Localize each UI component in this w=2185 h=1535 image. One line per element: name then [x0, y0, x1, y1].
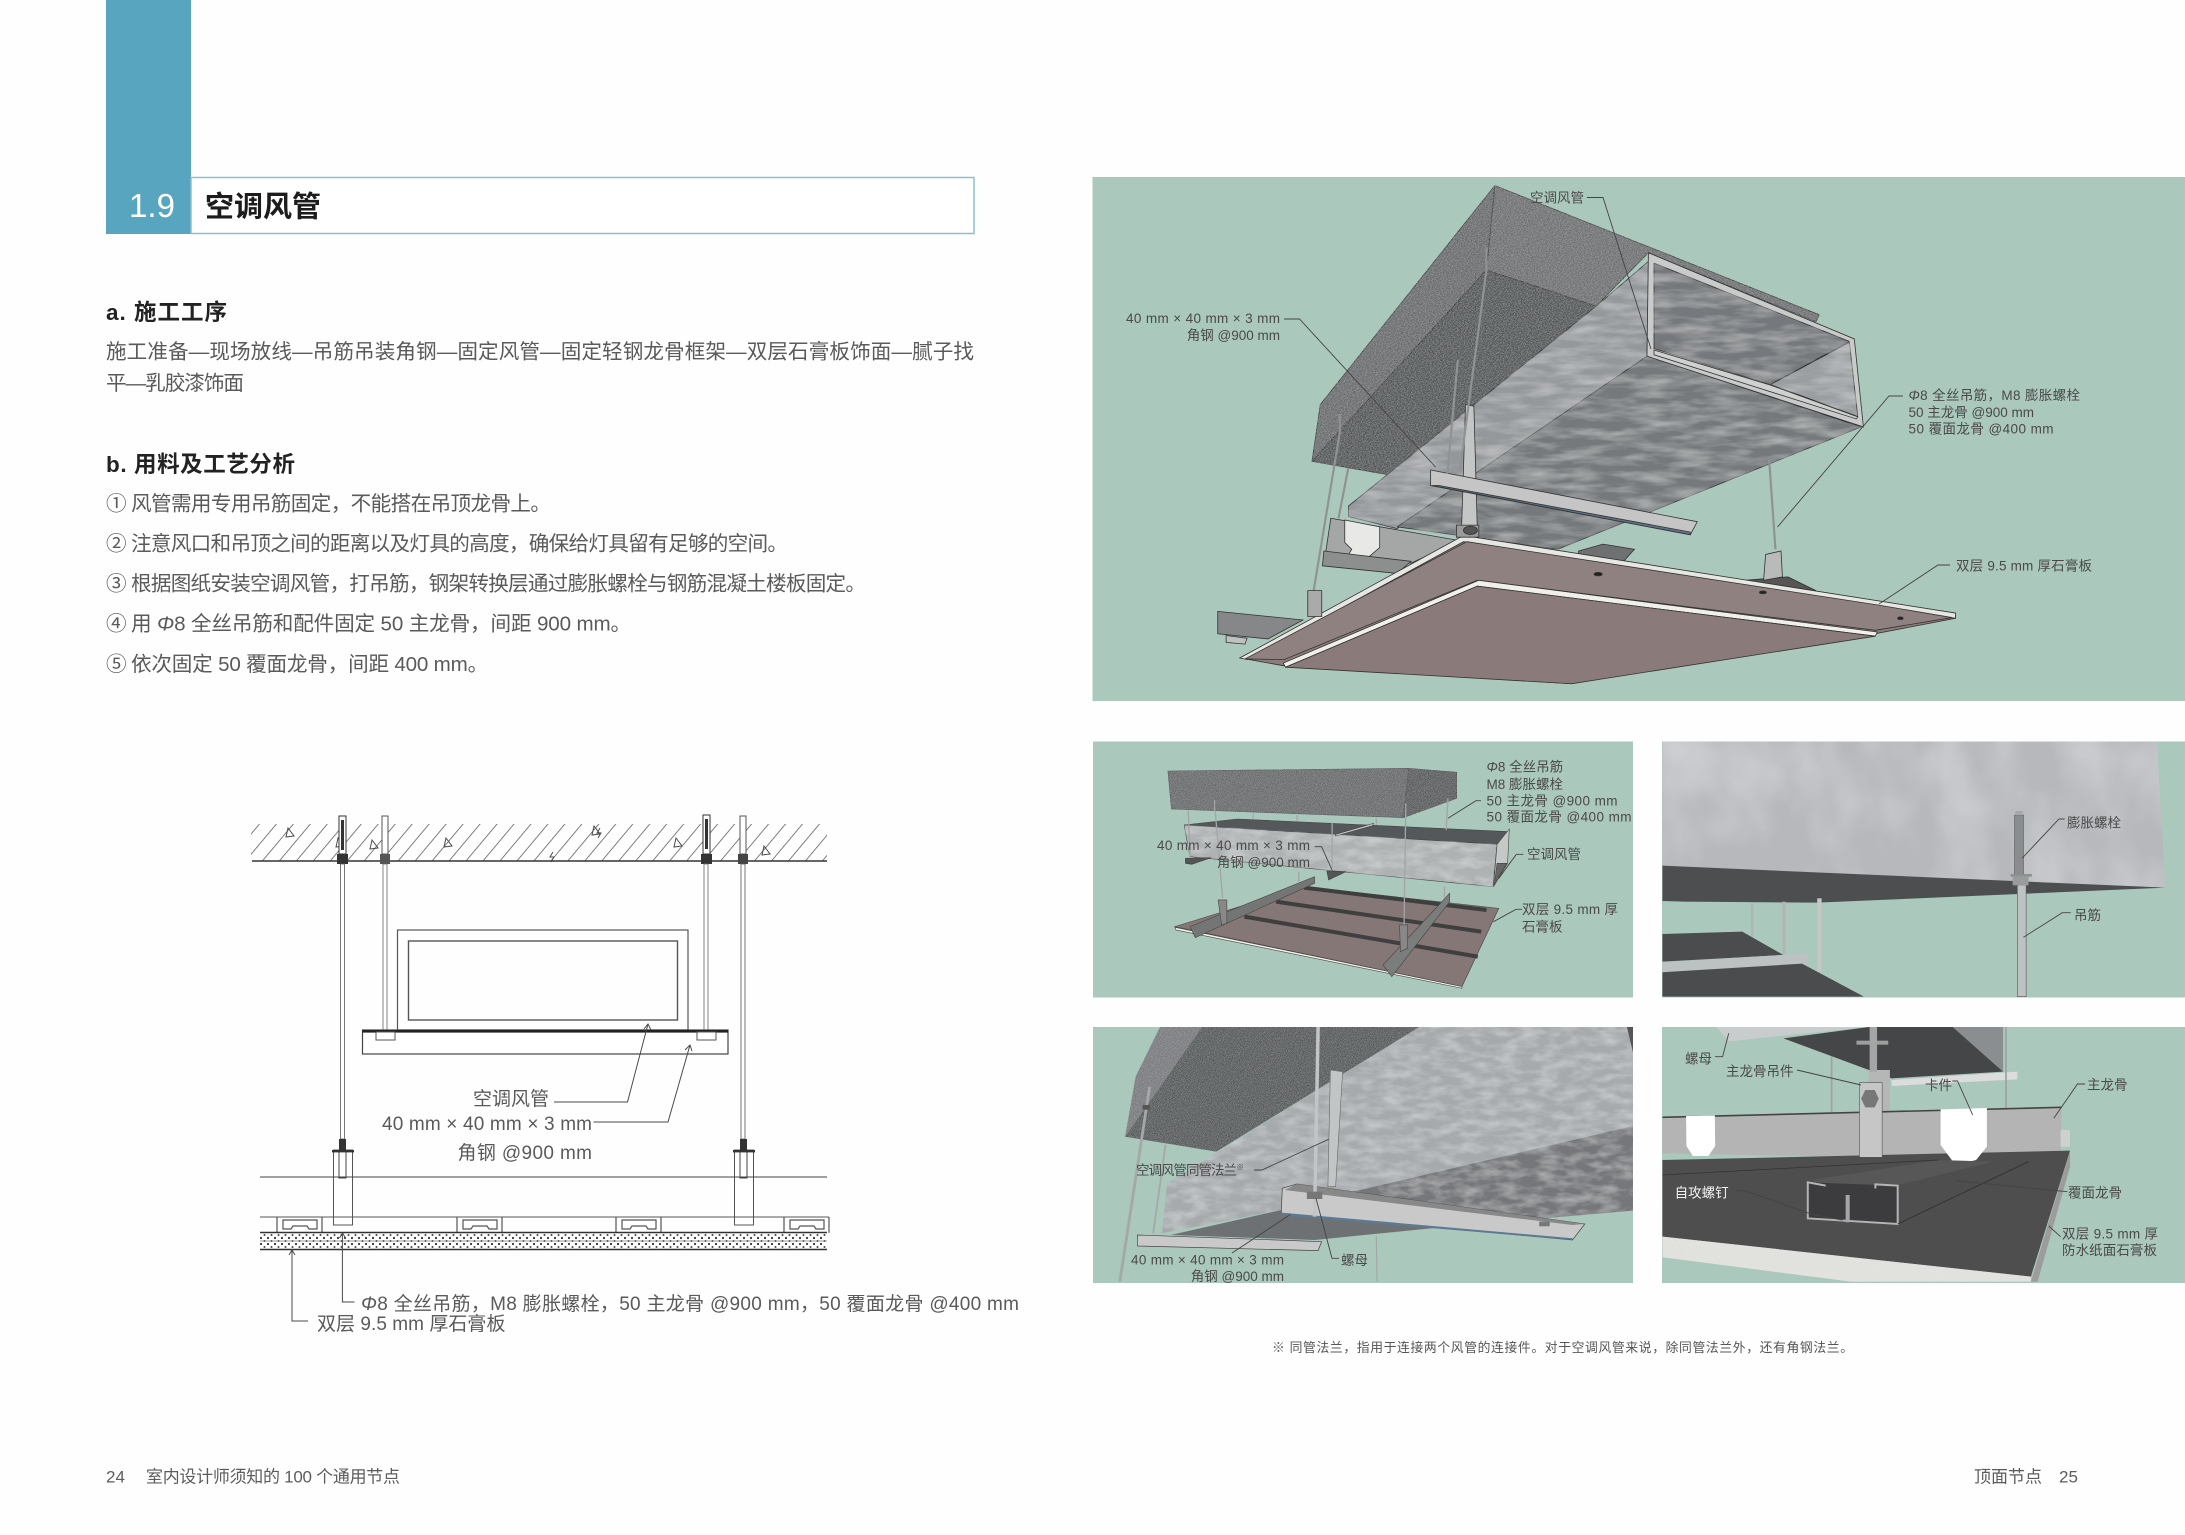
labels: 50 覆面龙骨 @400 mm — [1486, 810, 1632, 824]
labels: 主龙骨 — [2087, 1077, 2128, 1092]
callout: angle steel: 角钢 @900 mm — [1187, 328, 1280, 343]
callout: rod and keel — [1778, 387, 2080, 527]
callout: angle steel: 角钢 @900 mm — [458, 1142, 592, 1164]
item 4: 用 Φ8 全丝吊筋和配件固定 50 主龙骨，间距 900 mm。 — [131, 612, 631, 636]
callout: rod and keel: 50 覆面龙骨 @400 mm — [1908, 422, 2054, 436]
callout: angle steel — [1126, 311, 1436, 467]
callout: gypsum board: 双层 9.5 mm 厚石膏板 — [1956, 558, 2092, 574]
ceiling hangers — [332, 1139, 755, 1225]
labels — [1157, 758, 1632, 934]
text block: construction steps — [106, 300, 974, 395]
footer left: 室内设计师须知的 100 个通用节点 — [146, 1468, 400, 1486]
callout: angle steel — [382, 1045, 692, 1164]
footer right: 顶面节点 — [1974, 1468, 2042, 1486]
keel detail — [1662, 1027, 2070, 1282]
item 1: ① — [106, 492, 127, 516]
callout: gypsum board — [289, 1250, 506, 1335]
section header — [106, 0, 974, 234]
labels: 防水纸面石膏板 — [2062, 1242, 2158, 1258]
callout: hanger rod and keel — [340, 1233, 1019, 1315]
double gypsum board — [260, 1232, 827, 1250]
labels — [1131, 1139, 1368, 1284]
labels: 角钢 @900 mm — [1191, 1269, 1284, 1284]
labels: Φ8 全丝吊筋 — [1486, 758, 1563, 774]
ceiling lines and keel — [260, 1177, 829, 1233]
section number: 1.9 — [129, 187, 175, 224]
callout: rod and keel: Φ8 全丝吊筋，M8 膨胀螺栓 — [1908, 387, 2080, 403]
section drawing — [251, 815, 1019, 1335]
callout: rod and keel: 50 主龙骨 @900 mm — [1908, 405, 2034, 420]
labels: 覆面龙骨 — [2068, 1186, 2122, 1201]
callout: angle steel: 40 mm × 40 mm × 3 mm — [1126, 311, 1280, 326]
labels: 石膏板 — [1522, 918, 1563, 934]
labels — [1675, 1033, 2158, 1258]
item 5: 依次固定 50 覆面龙骨，间距 400 mm。 — [131, 653, 488, 676]
labels — [2022, 815, 2122, 937]
labels: 螺母 — [1341, 1253, 1368, 1268]
concrete slab — [251, 824, 827, 862]
labels: 螺母 — [1685, 1051, 1712, 1066]
panel: bolt close-up — [1662, 742, 2185, 998]
heading a: a. 施工工序 — [106, 300, 227, 325]
bolt and duct detail — [1662, 742, 2165, 997]
title box — [191, 178, 974, 234]
text block: materials and process — [106, 452, 866, 676]
steps paragraph: 施工准备—现场放线—吊筋吊装角钢—固定风管—固定轻钢龙骨框架—双层石膏板饰面—腻子找 — [106, 340, 974, 364]
item 3: ③ — [106, 572, 127, 596]
callout: gypsum board — [1879, 558, 2092, 604]
angle steel — [362, 1030, 728, 1054]
labels: 卡件 — [1925, 1078, 1952, 1093]
panel: angle steel close-up — [1093, 1027, 1633, 1284]
labels: 空调风管同管法兰 — [1136, 1163, 1237, 1178]
item 1: 风管需用专用吊筋固定，不能搭在吊顶龙骨上。 — [131, 492, 551, 516]
labels: 双层 9.5 mm 厚 — [2062, 1226, 2158, 1241]
footer right — [1974, 1468, 2078, 1486]
title: 空调风管 — [205, 190, 321, 224]
labels: 主龙骨吊件 — [1726, 1064, 1794, 1079]
air duct section — [398, 930, 688, 1030]
labels: 膨胀螺栓 — [2067, 815, 2122, 830]
exploded assembly — [1168, 768, 1509, 988]
item 3: 根据图纸安装空调风管，打吊筋，钢架转换层通过膨胀螺栓与钢筋混凝土楼板固定。 — [131, 572, 866, 596]
labels: 吊筋 — [2074, 907, 2101, 923]
footer right: 25 — [2059, 1468, 2078, 1486]
panel: exploded view — [1093, 742, 1633, 998]
hanger rods and bolts — [337, 815, 748, 1139]
footer left: 24 — [106, 1468, 125, 1486]
item 4: ④ — [106, 612, 127, 636]
callout: angle steel: 40 mm × 40 mm × 3 mm — [382, 1114, 592, 1135]
panel: keel close-up — [1662, 1027, 2185, 1283]
item 5: ⑤ — [106, 653, 127, 676]
labels: 40 mm × 40 mm × 3 mm — [1131, 1252, 1284, 1267]
callout: air duct — [473, 1024, 651, 1110]
labels: 角钢 @900 mm — [1217, 855, 1310, 870]
angle steel detail — [1120, 1027, 1633, 1282]
labels: 双层 9.5 mm 厚 — [1522, 902, 1618, 917]
footnote: ※ 同管法兰，指用于连接两个风管的连接件。对于空调风管来说，除同管法兰外，还有角钢法兰。 — [1272, 1340, 1853, 1355]
text block: construction steps: 平—乳胶漆饰面 — [106, 372, 244, 395]
header blue tab — [106, 0, 191, 234]
heading b: b. 用料及工艺分析 — [106, 452, 295, 477]
3D duct assembly — [1218, 186, 1956, 684]
callout: air duct — [1530, 190, 1651, 349]
labels: 50 主龙骨 @900 mm — [1486, 794, 1618, 808]
panel: main 3D view — [1092, 177, 2185, 701]
labels: 40 mm × 40 mm × 3 mm — [1157, 838, 1310, 853]
labels: ※ — [1236, 1163, 1244, 1172]
callout: air duct: 空调风管 — [473, 1088, 549, 1110]
item 2: ② — [106, 532, 127, 556]
item 2: 注意风口和吊顶之间的距离以及灯具的高度，确保给灯具留有足够的空间。 — [131, 532, 788, 556]
callout: gypsum board: 双层 9.5 mm 厚石膏板 — [317, 1312, 506, 1335]
labels: 空调风管 — [1527, 847, 1581, 862]
labels: M8 膨胀螺栓 — [1486, 777, 1564, 792]
callout: hanger rod and keel: Φ8 全丝吊筋，M8 膨胀螺栓，50 主龙骨 @900 mm，50 覆面龙骨 @400 mm — [361, 1293, 1019, 1315]
callout: air duct: 空调风管 — [1530, 190, 1584, 206]
labels: 自攻螺钉 — [1675, 1185, 1729, 1200]
